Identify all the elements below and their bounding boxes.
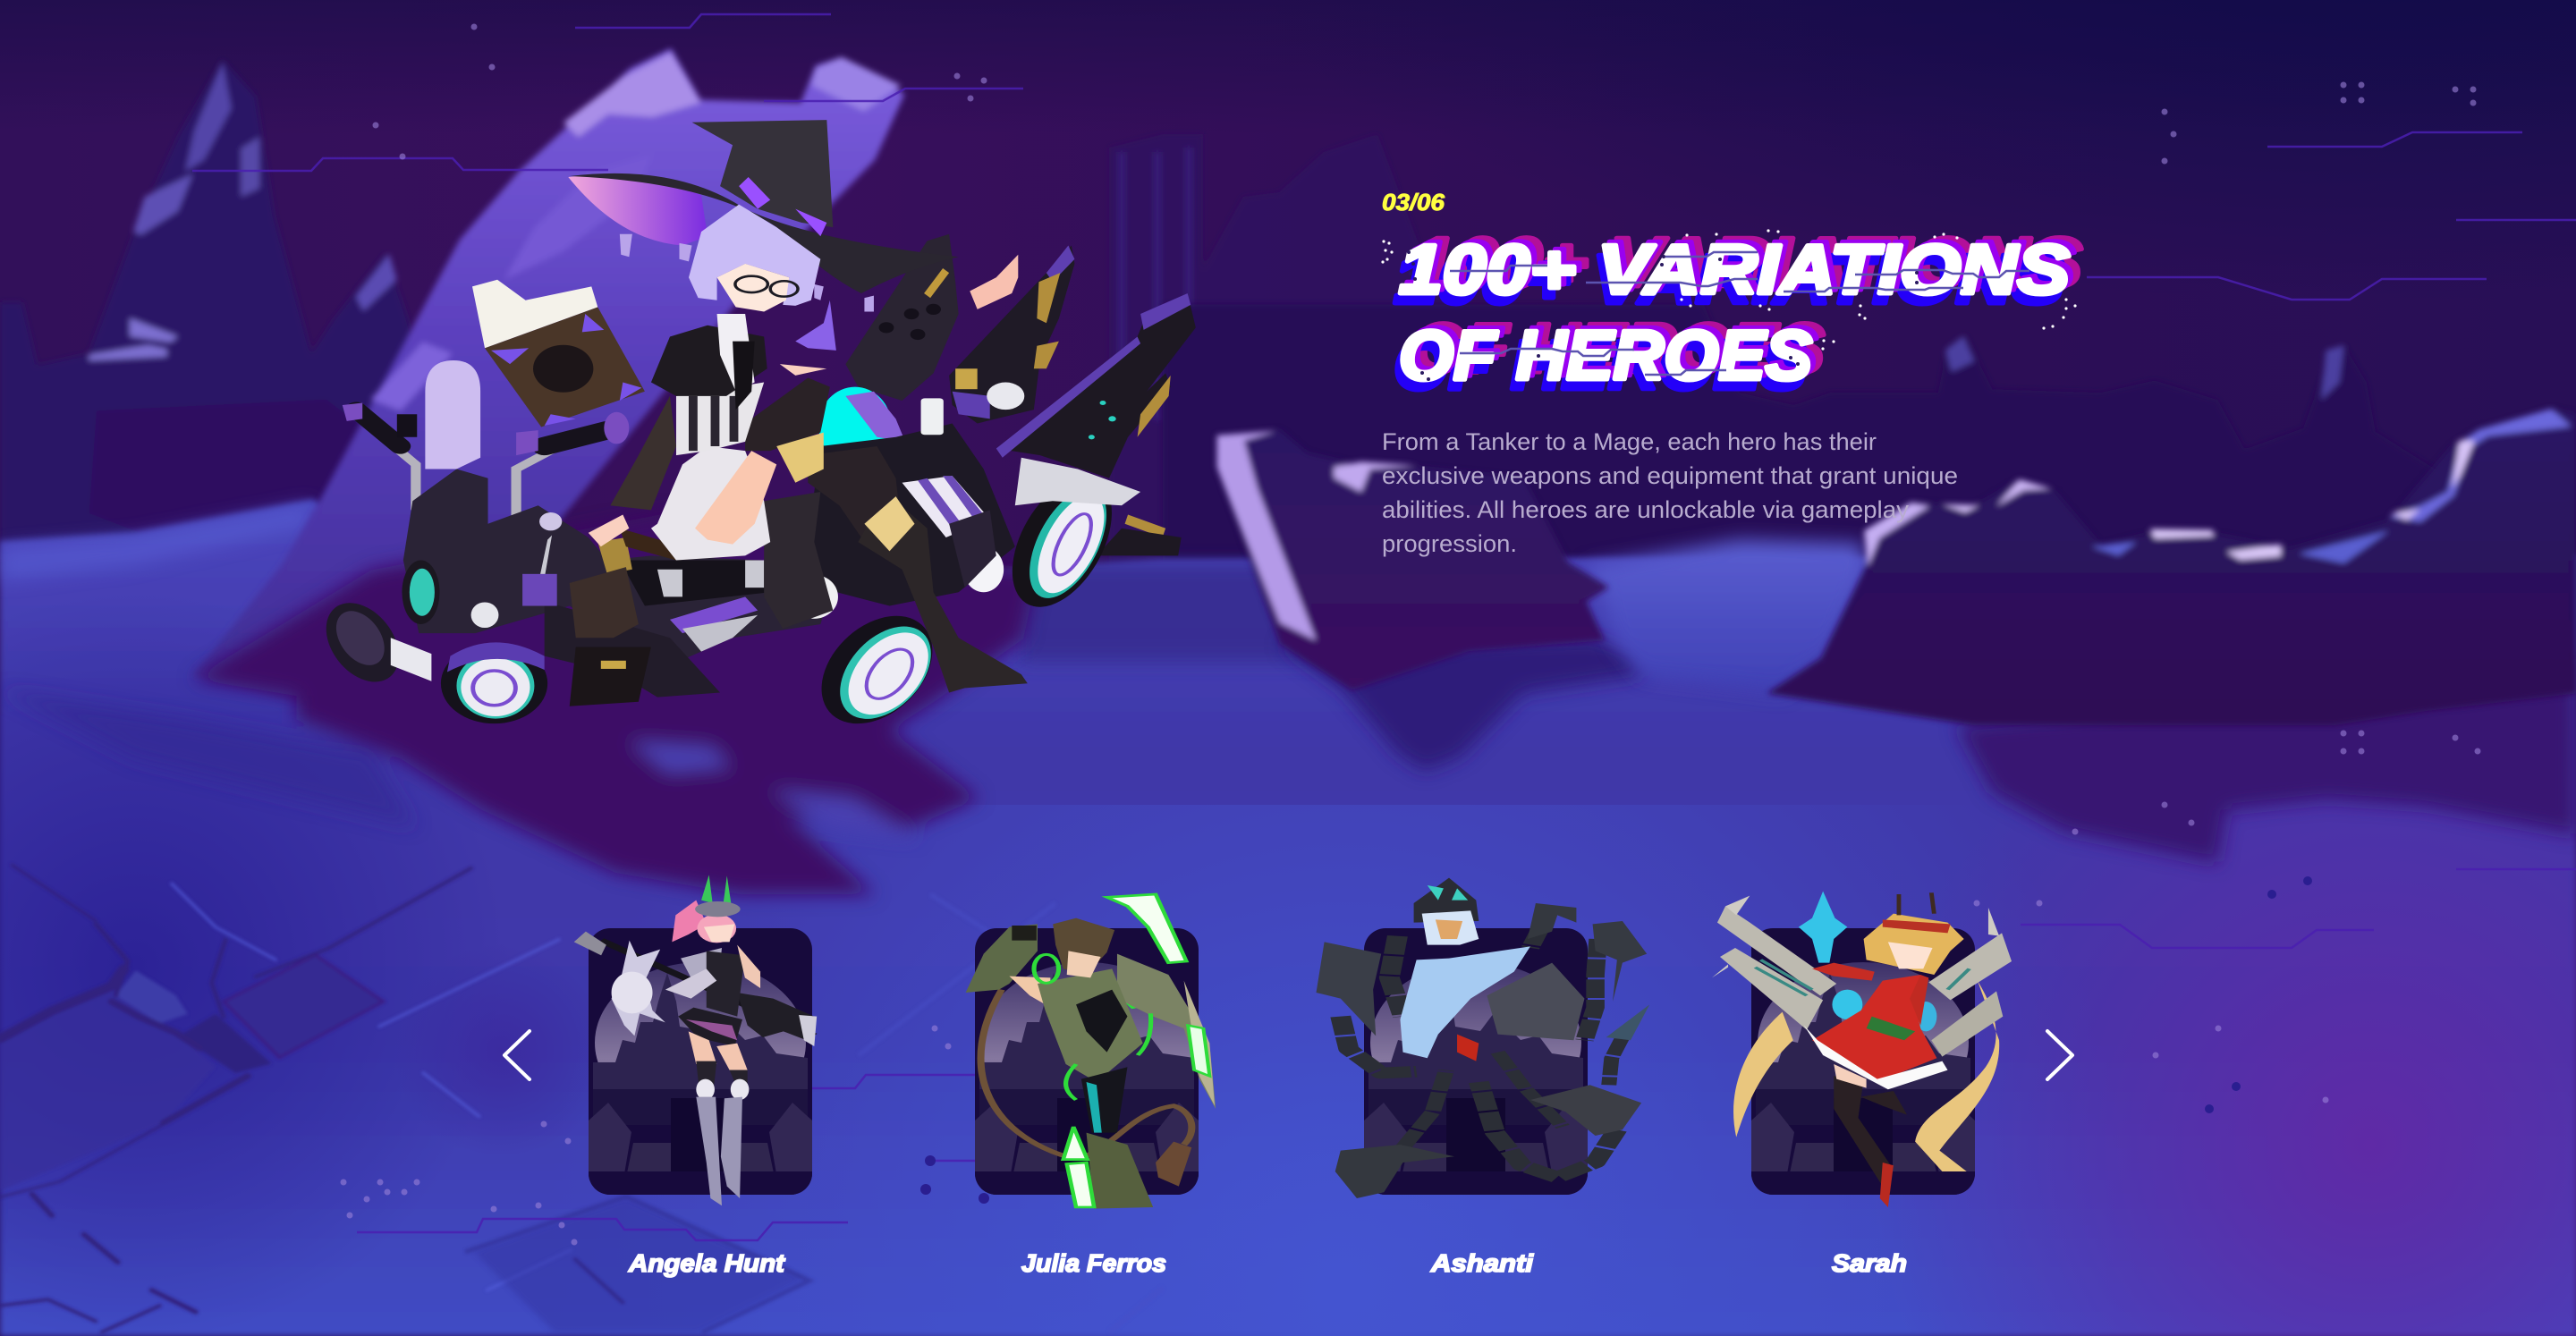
rear wing middle: [949, 245, 1074, 423]
character: Angela Hunt: [574, 875, 817, 1205]
torso white: [676, 383, 764, 455]
description paragraph: progression.: [1382, 530, 1517, 557]
headlight: [402, 561, 440, 624]
title: 100+ variations of heroes: 100+ VARIATIONS: [1399, 230, 2070, 309]
hero card: Sarah: [1712, 892, 2012, 1207]
legs and boots: [764, 492, 833, 629]
glasses: [735, 276, 798, 297]
pouches: [570, 567, 639, 638]
title: 100+ variations of heroes: OF HEROES: [1404, 312, 1818, 391]
hair: [689, 205, 820, 306]
title: 100+ variations of heroes: OF HEROES: [1399, 316, 1812, 394]
background: far mountains left: [0, 60, 423, 559]
hero card: Julia Ferros: [966, 894, 1216, 1209]
hero card: Angela Hunt: [574, 875, 817, 1205]
title: 100+ variations of heroes: 100+ VARIATIONS: [1394, 240, 2064, 318]
background: ground shadows: [0, 513, 2576, 894]
description paragraph: exclusive weapons and equipment that grant unique: [1382, 462, 1958, 489]
hero names: Angela Hunt: [628, 1249, 786, 1277]
middle wheel: [800, 603, 954, 737]
background: paving stones: [0, 865, 1163, 1332]
card background: [975, 928, 1199, 1195]
background: ground: [0, 499, 2576, 1336]
sleeve: [610, 396, 676, 510]
hero names: Julia Ferros: [1021, 1249, 1166, 1277]
hero names: Ashanti: [1430, 1249, 1534, 1277]
hero card: Ashanti: [1317, 878, 1649, 1198]
character: Sarah: [1712, 892, 2012, 1207]
background: sky: [0, 0, 2576, 715]
thigh and skirt: [651, 446, 770, 561]
cyan engine: [818, 387, 892, 464]
card background: [589, 928, 812, 1195]
title: 100+ variations of heroes: OF HEROES: [1394, 326, 1807, 404]
hero names: [628, 1249, 1907, 1277]
description paragraph: [1382, 428, 1958, 557]
background: horizon mountains right: [1163, 304, 2576, 566]
rear wing right: [996, 293, 1196, 478]
card background: [1751, 928, 1975, 1195]
background: bright ground patch: [1587, 539, 1866, 693]
title: 100+ variations of heroes: 100+ VARIATIONS: [1411, 223, 2082, 301]
background: central rock: [1216, 430, 1609, 689]
title: 100+ variations of heroes: [1394, 223, 2082, 404]
character: Julia Ferros: [966, 894, 1216, 1209]
background: ruined columns: [1109, 134, 1610, 572]
rear bike body: [801, 423, 1015, 606]
handlebars and windshield: [425, 360, 480, 469]
rear fender left wheel: [312, 596, 412, 689]
description paragraph: abilities. All heroes are unlockable via gameplay: [1382, 496, 1910, 523]
arrow: previous: [504, 1031, 530, 1079]
background: right rock formation: [1767, 409, 2576, 725]
hero: witch on motorbike: [312, 120, 1196, 737]
shawl: [651, 326, 767, 396]
card background: [1364, 928, 1588, 1195]
arrow: next: [2047, 1031, 2072, 1079]
counter: 03/06: 03/06: [1382, 189, 1445, 216]
hand: [970, 255, 1018, 309]
bike main body: [403, 469, 833, 692]
right wheel: [993, 469, 1131, 616]
background: leaning stone slab: [193, 48, 904, 713]
seat: [620, 528, 745, 561]
character: Ashanti: [1317, 878, 1649, 1198]
white canisters: [902, 476, 990, 537]
description paragraph: From a Tanker to a Mage, each hero has their: [1382, 428, 1877, 455]
hat brim underside: [568, 174, 708, 245]
title circuit overlay: [1381, 229, 2077, 381]
face: [717, 264, 789, 311]
front wheel: [441, 643, 547, 723]
title: 100+ variations of heroes: OF HEROES: [1411, 309, 1825, 387]
hero names: Sarah: [1832, 1249, 1907, 1277]
book: [485, 307, 645, 427]
hat cone: [692, 120, 833, 227]
rear wing left: [845, 234, 959, 401]
title: 100+ variations of heroes: 100+ VARIATIONS: [1404, 226, 2075, 305]
